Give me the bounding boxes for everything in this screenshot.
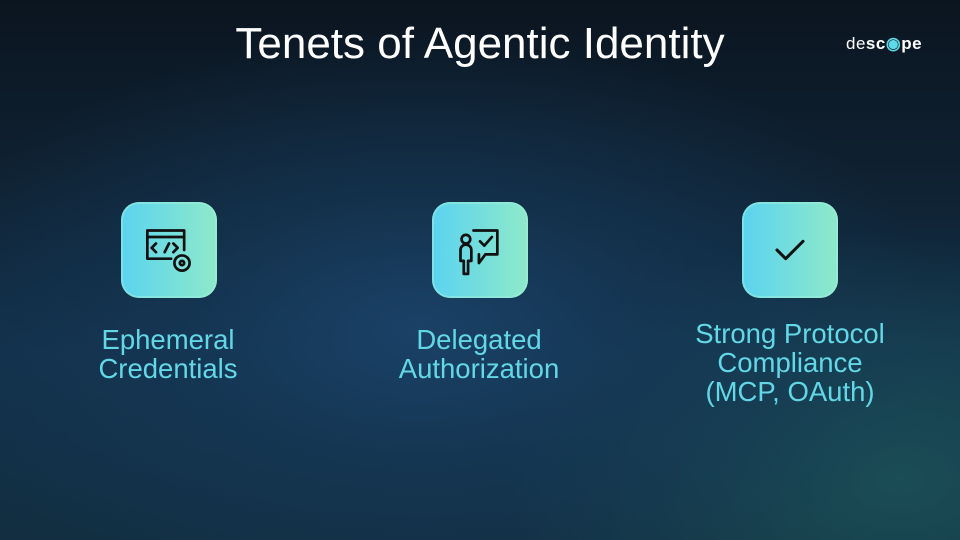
label: delegated authorization: Delegated [416,324,542,355]
label: delegated authorization: Authorization [399,353,559,384]
label: ephemeral credentials: Credentials [98,353,238,384]
title: Tenets of Agentic Identity [235,19,725,68]
icon: person with check bubble [432,202,528,298]
icon: check [742,202,838,298]
icon: code window with gear [121,202,217,298]
label: ephemeral credentials [98,324,238,384]
logo: desc◉pe [846,34,922,53]
label: strong protocol compliance: Compliance [717,347,863,378]
label: strong protocol compliance: Strong Protocol [695,318,885,349]
label: strong protocol compliance [695,318,885,407]
label: ephemeral credentials: Ephemeral [102,324,234,355]
label: strong protocol compliance: (MCP, OAuth) [705,376,875,407]
label: delegated authorization [398,324,559,384]
